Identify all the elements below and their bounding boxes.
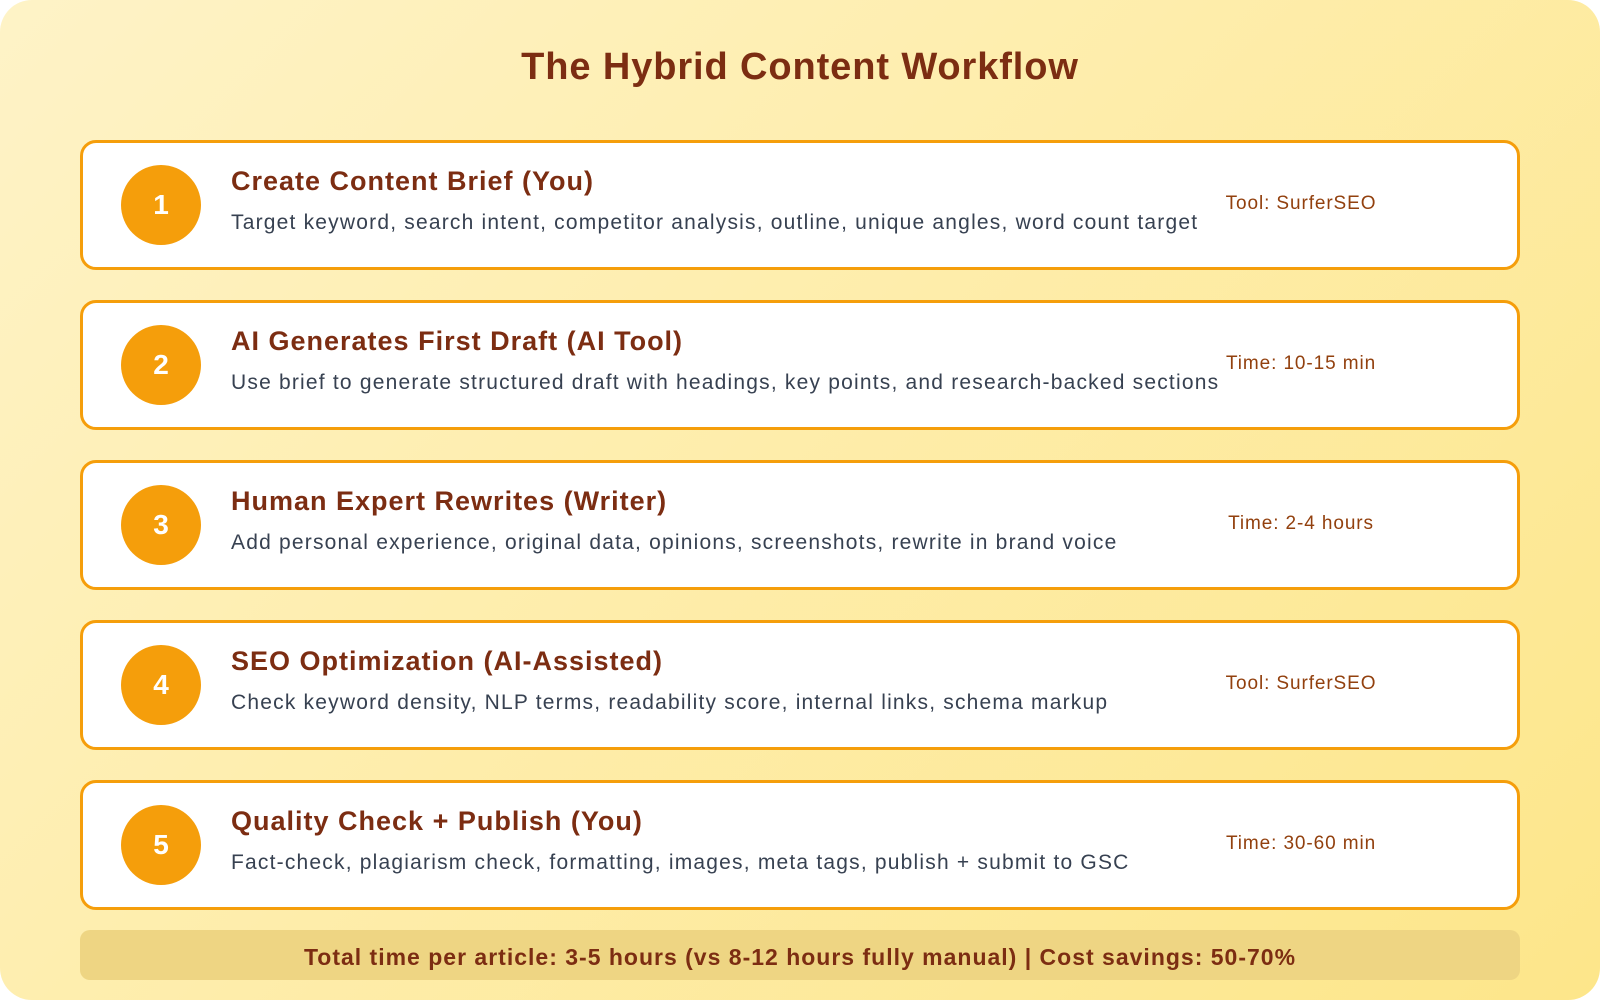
panel: step 4 — [80, 620, 1520, 750]
step 1 description: Target keyword, search intent, competitor analysis, outline, unique angles, word count target — [231, 211, 1198, 234]
icon: number 4 — [121, 645, 201, 725]
icon: number 5 — [121, 805, 201, 885]
step 4 heading: SEO Optimization (AI-Assisted) — [231, 646, 663, 676]
step 2 description: Use brief to generate structured draft with headings, key points, and research-backed sections — [231, 371, 1219, 394]
step 3 heading: Human Expert Rewrites (Writer) — [231, 486, 667, 516]
footer summary — [80, 930, 1520, 980]
step 3 time: Time: 2-4 hours — [1228, 513, 1374, 534]
step 5 time: Time: 30-60 min — [1226, 833, 1376, 854]
icon: number 3 — [121, 485, 201, 565]
step 5 description: Fact-check, plagiarism check, formatting, images, meta tags, publish + submit to GSC — [231, 851, 1130, 874]
icon: number 4: 4 — [153, 669, 169, 700]
step 5 heading: Quality Check + Publish (You) — [231, 806, 643, 836]
step 4 description: Check keyword density, NLP terms, readability score, internal links, schema markup — [231, 691, 1108, 714]
step 1 tool: Tool: SurferSEO — [1226, 193, 1376, 214]
step 3 description: Add personal experience, original data, opinions, screenshots, rewrite in brand voice — [231, 531, 1117, 554]
step 4 tool: Tool: SurferSEO — [1226, 673, 1376, 694]
step 2 heading: AI Generates First Draft (AI Tool) — [231, 326, 683, 356]
icon: number 2 — [121, 325, 201, 405]
icon: number 3: 3 — [153, 509, 169, 540]
panel: step 2 — [80, 300, 1520, 430]
footer summary: Total time per article: 3-5 hours (vs 8-12 hours fully manual) | Cost savings: 50-70% — [304, 944, 1296, 970]
panel: step 3 — [80, 460, 1520, 590]
panel: step 5 — [80, 780, 1520, 910]
icon: number 1: 1 — [153, 189, 169, 220]
icon: number 1 — [121, 165, 201, 245]
icon: number 2: 2 — [153, 349, 169, 380]
step 2 time: Time: 10-15 min — [1226, 353, 1376, 374]
step 1 heading: Create Content Brief (You) — [231, 166, 594, 196]
panel: step 1 — [80, 140, 1520, 270]
icon: number 5: 5 — [153, 829, 169, 860]
title: The Hybrid Content Workflow — [521, 46, 1079, 88]
